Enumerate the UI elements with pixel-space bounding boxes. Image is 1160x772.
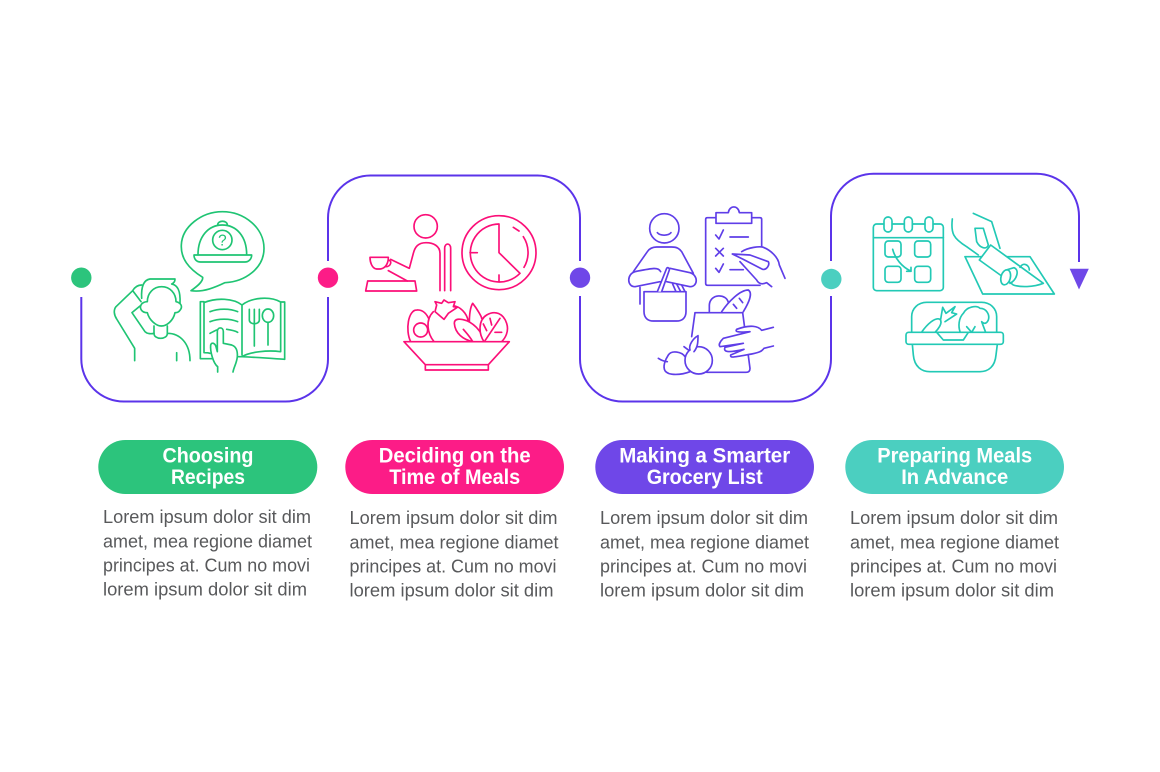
step 3 text: Lorem ipsum dolor sit dim [600, 508, 808, 528]
step 1 text: principes at. Cum no movi [103, 556, 310, 576]
step 1 text: amet, mea regione diamet [103, 531, 312, 551]
step 3 heading: Grocery List [647, 466, 763, 489]
icon: meal prep [873, 213, 1054, 372]
icon: grocery list [629, 207, 785, 374]
step 4 text: lorem ipsum dolor sit dim [850, 581, 1054, 601]
step 1 text: Lorem ipsum dolor sit dim [103, 507, 311, 527]
step 3 heading [595, 440, 814, 494]
step marker: pink [318, 268, 338, 288]
step 2 heading: Time of Meals [389, 466, 520, 489]
arrowhead [1070, 269, 1089, 290]
step 3 text [600, 508, 809, 601]
step 2 text: principes at. Cum no movi [350, 557, 556, 577]
step marker: teal [821, 269, 842, 289]
icon: meal timing [366, 215, 536, 370]
step marker: purple [570, 268, 590, 288]
step 3 heading: Making a Smarter [619, 445, 790, 468]
step 2 heading: Deciding on the [379, 445, 531, 468]
step 1 heading: Recipes [171, 466, 245, 489]
step 1 heading: Choosing [162, 445, 254, 468]
icon: person reading recipes [114, 212, 285, 372]
step 2 text: amet, mea regione diamet [350, 532, 558, 552]
step 4 heading: Preparing Meals [877, 445, 1032, 468]
step 2 text [350, 508, 558, 601]
flow line [81, 174, 1079, 402]
step 4 heading [845, 440, 1064, 494]
step 2 heading [345, 440, 564, 494]
step 4 text [850, 508, 1059, 601]
step 4 text: amet, mea regione diamet [850, 532, 1059, 552]
icon: person reading recipes: ? [218, 233, 227, 250]
step 4 text: Lorem ipsum dolor sit dim [850, 508, 1058, 528]
step 1 text [103, 507, 312, 600]
step 3 text: amet, mea regione diamet [600, 532, 809, 552]
step 2 text: Lorem ipsum dolor sit dim [350, 508, 558, 528]
step marker: green [71, 268, 92, 288]
step 1 text: lorem ipsum dolor sit dim [103, 580, 307, 600]
step 2 text: lorem ipsum dolor sit dim [350, 581, 554, 601]
step 3 text: principes at. Cum no movi [600, 557, 807, 577]
step 3 text: lorem ipsum dolor sit dim [600, 581, 804, 601]
step 1 heading [98, 440, 317, 494]
step 4 text: principes at. Cum no movi [850, 557, 1057, 577]
step 4 heading: In Advance [901, 466, 1008, 489]
